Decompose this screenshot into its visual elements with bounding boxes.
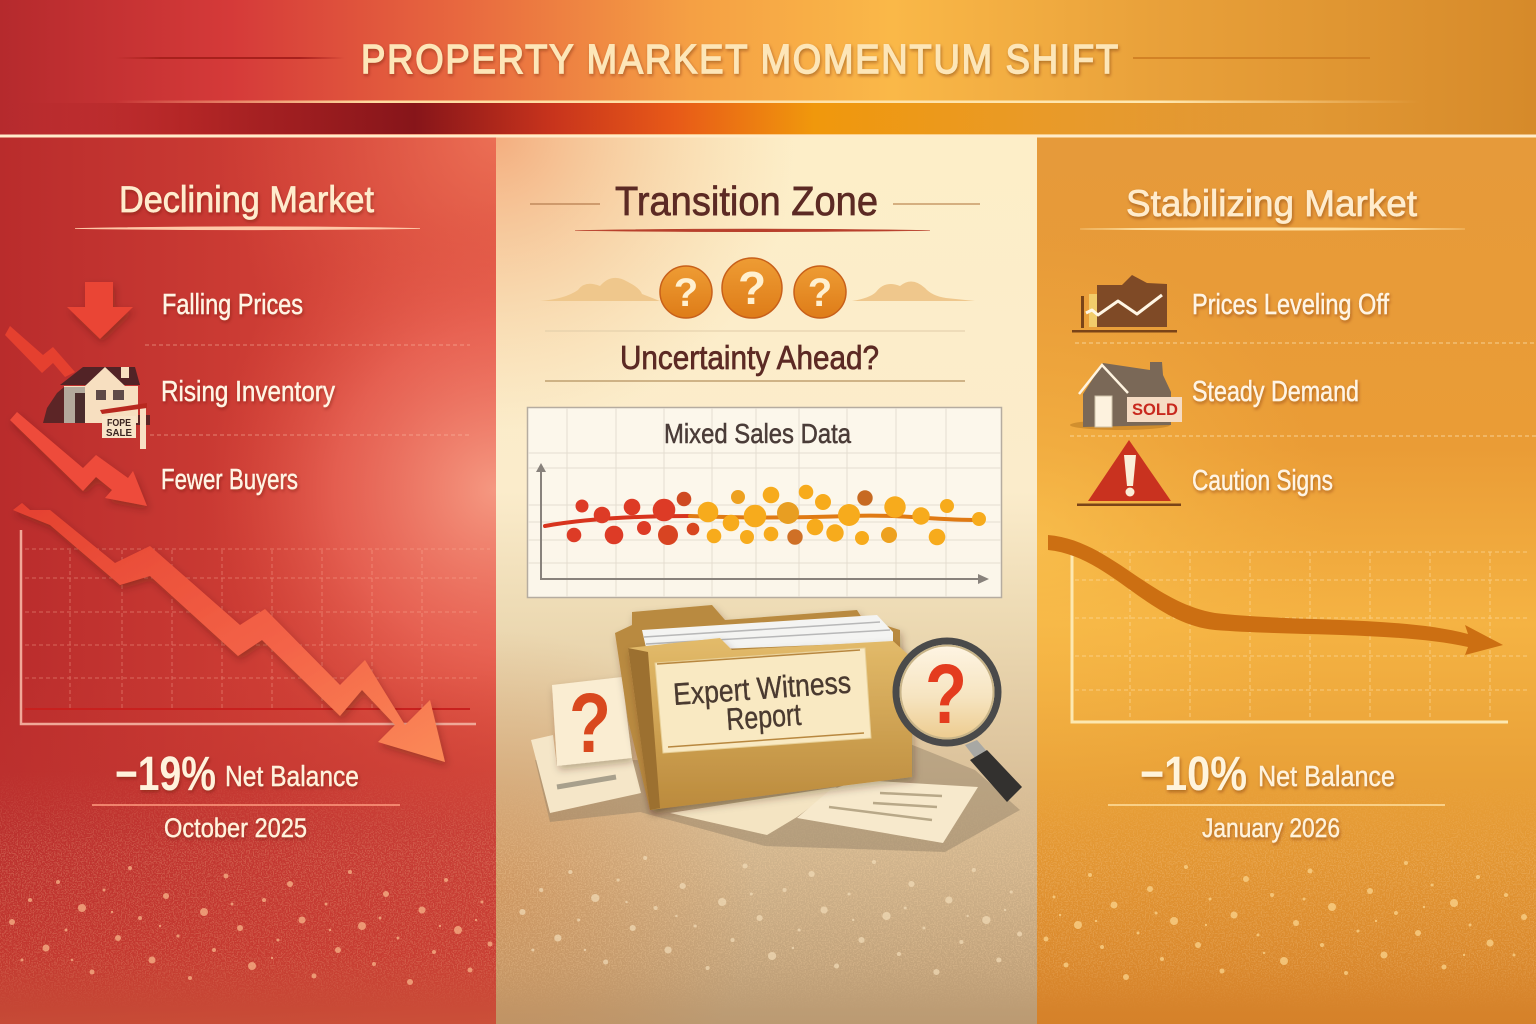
panel: stabilizing market [1037, 136, 1536, 1024]
icon: question marks [660, 258, 846, 318]
heading: declining market [75, 179, 420, 230]
arrow: levelling trend [1048, 535, 1503, 655]
icon: folder [615, 605, 912, 810]
icon: question note: ? [569, 676, 611, 770]
divider lines [145, 345, 470, 435]
icon: small zigzag arrow [5, 326, 75, 377]
chart: mixed sales data [528, 408, 1002, 598]
icon: house for sale [43, 367, 150, 449]
icon: left cloud [540, 278, 660, 301]
divider lines [1070, 343, 1536, 436]
icon: falling prices arrow [67, 282, 133, 339]
label: expert witness report: Expert Witness [672, 665, 852, 712]
icon: fewer buyers arrow [10, 412, 147, 506]
stat: minus 19 percent net balance: Net Balance [225, 761, 359, 793]
header banner [0, 0, 1536, 138]
chart: mixed sales data: Mixed Sales Data [664, 418, 851, 449]
icon: house for sale: FOPE [107, 418, 131, 429]
ground shadow [535, 740, 1020, 852]
stat: minus 10 percent net balance: −10% [1140, 748, 1247, 801]
stat: minus 10 percent net balance [1108, 748, 1445, 843]
label: expert witness report [655, 648, 871, 753]
title: PROPERTY MARKET MOMENTUM SHIFT [361, 36, 1120, 82]
icon: question note [531, 676, 641, 813]
label: prices leveling off: Prices Leveling Off [1192, 289, 1390, 321]
label: fewer buyers: Fewer Buyers [161, 464, 298, 496]
icon: sold house [1070, 362, 1182, 430]
icon: magnifying glass [896, 641, 1022, 802]
icon: magnifying glass: ? [925, 647, 967, 741]
stat: minus 19 percent net balance: October 2025 [164, 813, 307, 843]
label: rising inventory: Rising Inventory [161, 376, 335, 408]
panel: declining market [0, 136, 496, 1024]
heading: transition zone: Transition Zone [615, 178, 878, 224]
stat: minus 19 percent net balance: −19% [115, 748, 216, 801]
text: uncertainty ahead: Uncertainty Ahead? [620, 339, 879, 376]
icon: sold house: SOLD [1132, 400, 1178, 419]
arrow: large falling trend [13, 503, 445, 762]
icon: bottom papers [670, 780, 978, 843]
panel: transition zone [496, 136, 1037, 1024]
stat: minus 10 percent net balance: Net Balance [1258, 761, 1395, 793]
chart: levelling grid [1072, 552, 1530, 722]
label: steady demand: Steady Demand [1192, 376, 1359, 408]
chart: falling grid [21, 530, 490, 724]
icon: house for sale: SALE [106, 428, 132, 439]
illustration: expert witness folder [531, 605, 1022, 852]
icon: caution triangle [1077, 440, 1181, 506]
stat: minus 19 percent net balance [92, 748, 400, 843]
icon: question marks: ? [674, 271, 698, 315]
icon: right cloud [852, 281, 975, 301]
stat: minus 10 percent net balance: January 2026 [1202, 813, 1340, 843]
heading: declining market: Declining Market [119, 179, 375, 220]
label: caution signs: Caution Signs [1192, 465, 1333, 497]
label: expert witness report: Report [725, 697, 803, 737]
heading: stabilizing market: Stabilizing Market [1126, 183, 1418, 224]
icon: question marks: ? [738, 262, 766, 314]
icon: prices levelling chart [1072, 275, 1177, 332]
icon: question marks: ? [808, 271, 832, 315]
label: falling prices: Falling Prices [162, 289, 303, 321]
